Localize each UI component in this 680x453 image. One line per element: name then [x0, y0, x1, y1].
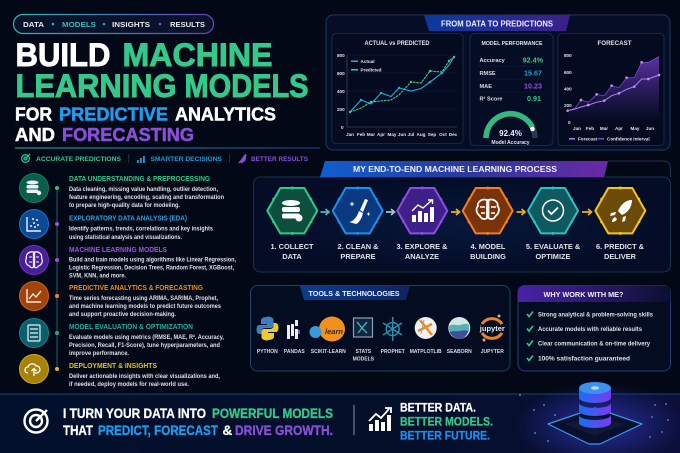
step: collect data: 1. COLLECT — [270, 242, 314, 251]
model performance card: MAE — [480, 84, 492, 90]
step 3: machine learning models: SVM, KNN, and more. — [69, 272, 126, 280]
chart: actual vs predicted: May — [388, 132, 397, 137]
footer statement: I TURN YOUR DATA INTO — [63, 406, 206, 421]
chart: forecast: FORECAST — [597, 40, 632, 47]
tool: prophet — [381, 317, 405, 355]
step 3: machine learning models: Build and train models using algorithms like Linear Regression, — [69, 256, 236, 264]
step: predict and deliver: 6. PREDICT & — [596, 242, 645, 251]
chart: forecast: 800 — [564, 53, 572, 58]
icon: checklist — [20, 318, 48, 348]
benefits row — [22, 154, 309, 164]
model performance card: 15.67 — [524, 68, 542, 78]
step 3: machine learning models: MACHINE LEARNING MODELS — [69, 245, 167, 254]
chart: actual vs predicted: 400 — [337, 89, 345, 94]
tool: matplotlib: MATPLOTLIB — [410, 349, 442, 355]
timeline — [55, 186, 59, 371]
step 5: model evaluation: improve performance. — [69, 350, 129, 357]
header pill: data, models, insights, results — [14, 14, 214, 34]
footer statement: THAT — [63, 423, 94, 438]
title: AND — [15, 124, 55, 145]
model performance card: Model Accuracy — [491, 140, 530, 146]
chart: forecast: Jan — [573, 126, 581, 131]
header: WHY WORK WITH ME? — [544, 292, 624, 299]
model performance card: RMSE — [480, 71, 496, 77]
checklist: Accurate models with reliable results — [538, 326, 643, 333]
tool: statsmodels: MODELS — [353, 356, 375, 362]
banner: TOOLS & TECHNOLOGIES — [308, 291, 400, 298]
tagline: BETTER DATA. — [400, 400, 476, 414]
banner: MY END-TO-END MACHINE LEARNING PROCESS — [353, 164, 557, 174]
header pill: data, models, insights, results: MODELS — [62, 20, 96, 29]
checklist — [527, 312, 654, 362]
arrow — [451, 209, 460, 215]
header pill: data, models, insights, results: DATA — [23, 20, 45, 29]
tool: jupyter: jupyter — [479, 324, 505, 333]
icon: cloud upload — [20, 354, 48, 384]
tool: statsmodels: STATS — [355, 349, 372, 355]
chart: actual vs predicted: 200 — [337, 107, 345, 112]
footer statement: DRIVE GROWTH. — [235, 423, 333, 438]
step: clean and prepare: 2. CLEAN & — [337, 242, 379, 251]
footer statement — [63, 406, 333, 438]
title: LEARNING — [16, 68, 176, 104]
network decoration — [519, 394, 669, 442]
chart: actual vs predicted: 600 — [337, 71, 345, 76]
title: MACHINE — [122, 37, 272, 73]
tool: seaborn — [447, 317, 472, 355]
chart: forecast: 600 — [564, 70, 572, 75]
chart: actual vs predicted: Jul — [408, 132, 414, 137]
tool: prophet: PROPHET — [381, 349, 405, 355]
chart: forecast: Feb — [586, 126, 594, 131]
benefits row: ACCURATE PREDICTIONS — [36, 156, 122, 163]
model performance card: R² Score — [480, 96, 503, 102]
step: model building: BUILDING — [470, 252, 506, 261]
tool: python — [256, 316, 278, 355]
step 6: deployment: Deliver actionable insights with clear visualizations and, — [69, 373, 220, 380]
chart: actual vs predicted: Dec — [449, 132, 458, 137]
step: explore and analyze — [397, 186, 448, 261]
header pill: data, models, insights, results: INSIGHTS — [112, 20, 150, 29]
title: FOR — [15, 104, 52, 124]
tool: scikit-learn: SCIKIT-LEARN — [311, 349, 346, 355]
step: evaluate and optimize: OPTIMIZE — [536, 252, 571, 261]
step 5: model evaluation: Precision, Recall, F1-Score), tune hyperparameters, and — [69, 342, 220, 349]
chart: forecast: Forecast — [578, 136, 598, 142]
step 1: data understanding: DATA UNDERSTANDING & PREPROCESSING — [69, 174, 210, 183]
step 1: data understanding: feature engineering, encoding, scaling and transformation — [69, 194, 224, 201]
chart: actual vs predicted: Apr — [377, 132, 385, 137]
panel: why work with me — [518, 286, 670, 371]
chart: actual vs predicted: Predicted — [360, 68, 382, 72]
chart: actual vs predicted: Aug — [417, 132, 426, 137]
step: evaluate and optimize: 5. EVALUATE & — [526, 242, 581, 251]
footer statement: POWERFUL MODELS — [212, 406, 333, 421]
tool: pandas — [284, 320, 305, 355]
panel: tools and technologies — [250, 286, 510, 371]
tool: jupyter: JUPYTER — [481, 349, 504, 355]
chart: actual vs predicted: 800 — [337, 53, 345, 58]
icon: growth chart — [369, 408, 391, 431]
title: BUILD — [16, 37, 110, 73]
arrow — [516, 209, 525, 215]
icon: target — [22, 154, 30, 162]
chart: forecast — [558, 34, 664, 146]
title: FORECASTING — [62, 124, 194, 145]
tool: scikit-learn — [310, 316, 346, 355]
model performance card: 92.4% — [499, 129, 522, 138]
arrow — [320, 209, 329, 215]
gauge — [486, 113, 535, 138]
header — [518, 286, 670, 302]
tool: scikit-learn: learn — [325, 327, 343, 336]
step 1: data understanding — [20, 174, 224, 209]
step: explore and analyze: ANALYZE — [405, 252, 439, 261]
chart: forecast: Jun — [646, 126, 654, 131]
step 4: predictive analytics — [20, 282, 222, 318]
chart: forecast: 0 — [568, 120, 571, 125]
checklist: 100% satisfaction guaranteed — [538, 356, 630, 362]
step 6: deployment: DEPLOYMENT & INSIGHTS — [69, 361, 157, 370]
step: predict and deliver — [595, 186, 645, 261]
chart: actual vs predicted: Jan — [346, 132, 354, 137]
icon: bars — [137, 156, 145, 163]
chart: actual vs predicted — [332, 34, 463, 144]
tagline — [400, 400, 493, 442]
tool: statsmodels — [353, 318, 375, 362]
step 6: deployment: if needed, deploy models for real-world use. — [69, 381, 189, 388]
title — [15, 37, 308, 145]
icon: scatter plot — [20, 210, 48, 238]
icon: database — [20, 174, 48, 202]
tagline: BETTER FUTURE. — [400, 428, 490, 442]
step 4: predictive analytics: and machine learning models to predict future outcomes — [69, 303, 222, 310]
header pill: data, models, insights, results: RESULTS — [170, 20, 205, 29]
step: predict and deliver: DELIVER — [604, 252, 637, 261]
banner — [424, 15, 570, 31]
step 6: deployment — [20, 354, 220, 388]
step: evaluate and optimize — [526, 186, 581, 261]
step: collect data: DATA — [282, 252, 302, 261]
step 4: predictive analytics: Time series forecasting using ARIMA, SARIMA, Prophet, — [69, 295, 218, 302]
chart: forecast: 400 — [564, 86, 572, 92]
panel: from data to predictions — [326, 15, 670, 150]
icon: database platform — [548, 382, 642, 444]
tool: matplotlib — [410, 317, 442, 355]
chart: forecast: Apr — [615, 126, 623, 131]
tool: python: PYTHON — [257, 349, 278, 355]
step 5: model evaluation — [20, 318, 224, 357]
benefits row: SMARTER DECISIONS — [150, 156, 223, 163]
step 3: machine learning models: Logistic Regression, Decision Trees, Random Forest, XGBoost, — [69, 264, 234, 272]
chart: forecast: Mar — [600, 126, 608, 131]
chart: forecast: 200 — [564, 103, 572, 108]
model performance card: MODEL PERFORMANCE — [482, 41, 543, 47]
title: PREDICTIVE — [59, 104, 168, 124]
chart: actual vs predicted: Feb — [357, 132, 365, 137]
title: MODELS — [184, 68, 308, 104]
tool: seaborn: SEABORN — [447, 349, 472, 355]
footer statement: & — [222, 423, 232, 438]
icon: line chart — [20, 282, 48, 310]
chart: actual vs predicted: Actual — [360, 59, 375, 64]
tagline: BETTER MODELS. — [400, 414, 493, 428]
tool: jupyter — [479, 314, 505, 355]
step: collect data — [267, 186, 317, 261]
chart: forecast: May — [631, 126, 640, 131]
model performance card: 10.23 — [524, 82, 542, 90]
arrow — [386, 209, 394, 215]
tool: pandas: PANDAS — [284, 349, 305, 355]
chart: actual vs predicted: Sep — [428, 132, 436, 137]
icon: target — [24, 410, 48, 432]
step: model building — [463, 186, 513, 261]
banner — [300, 286, 410, 300]
step: clean and prepare: PREPARE — [340, 252, 376, 261]
step 1: data understanding: Data cleaning, missing value handling, outlier detection, — [69, 186, 218, 193]
step: clean and prepare — [333, 186, 383, 261]
step 3: machine learning models — [20, 245, 236, 280]
step: model building: 4. MODEL — [471, 242, 506, 251]
step 4: predictive analytics: and support proactive decision-making. — [69, 311, 176, 318]
title: ANALYTICS — [175, 104, 276, 124]
chart: actual vs predicted: Mar — [367, 132, 375, 137]
model performance card: Accuracy — [480, 58, 506, 64]
chart: actual vs predicted: Jun — [398, 132, 406, 137]
step 4: predictive analytics: PREDICTIVE ANALYTICS & FORECASTING — [69, 283, 203, 292]
step: explore and analyze: 3. EXPLORE & — [397, 242, 448, 251]
chart: actual vs predicted: 0 — [341, 125, 344, 130]
footer statement: PREDICT, FORECAST — [98, 423, 219, 438]
step 5: model evaluation: Evaluate models using metrics (RMSE, MAE, R², Accuracy, — [69, 334, 224, 341]
icon: rocket — [238, 154, 246, 164]
chart: actual vs predicted: Oct — [439, 132, 447, 137]
step 5: model evaluation: MODEL EVALUATION & OPTIMIZATION — [69, 322, 193, 331]
footer band — [0, 382, 680, 453]
step 2: EDA — [20, 210, 213, 241]
checklist: Clear communication & on-time delivery — [538, 340, 651, 348]
step 2: EDA: using statistical analysis and visualizations. — [69, 234, 182, 241]
step 2: EDA: Identify patterns, trends, correlations and key insights — [69, 226, 213, 232]
checklist: Strong analytical & problem-solving skills — [538, 312, 654, 318]
benefits row: BETTER RESULTS — [251, 156, 309, 163]
panel: end-to-end process — [254, 161, 670, 272]
model performance card — [470, 34, 553, 146]
banner — [320, 161, 608, 177]
banner: FROM DATA TO PREDICTIONS — [441, 20, 554, 28]
arrow — [582, 209, 592, 215]
chart: forecast: Confidence Interval — [607, 136, 650, 142]
chart: actual vs predicted: ACTUAL vs PREDICTED — [364, 40, 430, 47]
model performance card: 0.91 — [527, 94, 541, 103]
step 2: EDA: EXPLORATORY DATA ANALYSIS (EDA) — [69, 214, 187, 222]
step 1: data understanding: to prepare high-quality data for modeling. — [69, 202, 180, 209]
icon: brain — [20, 246, 48, 274]
model performance card: 92.4% — [523, 56, 544, 64]
